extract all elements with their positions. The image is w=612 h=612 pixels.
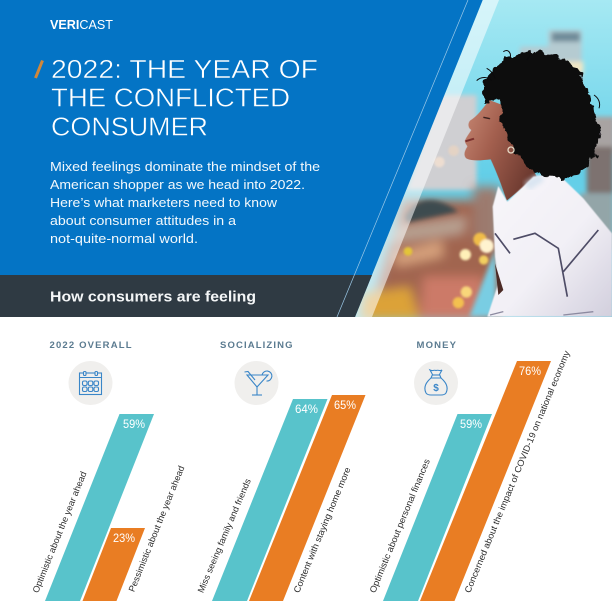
- title: THE CONFLICTED: [51, 84, 290, 112]
- intro text: American shopper as we head into 2022.: [50, 177, 305, 192]
- neck and face: [464, 100, 537, 201]
- logo: Vericast: VERICAST: [50, 18, 113, 32]
- bar: optimistic 59%: [45, 414, 154, 601]
- heading band background: [0, 275, 372, 317]
- bar: concerned about COVID-19 impact 76%: [420, 361, 551, 601]
- photo: woman looking up on a city rooftop: [340, 0, 612, 320]
- column: money: [368, 340, 572, 601]
- bar: optimistic about personal finances 59%: [383, 414, 492, 601]
- section heading: How consumers are feeling: How consumers are feeling: [50, 290, 256, 306]
- bar: pessimistic 23%: 23%: [113, 533, 135, 545]
- title: CONSUMER: [51, 114, 208, 142]
- icon: money bag: $: [433, 383, 439, 394]
- label: pessimistic about the year ahead: Pessimistic about the year ahead: [127, 464, 186, 593]
- bar: optimistic about personal finances 59%: 59%: [460, 419, 482, 431]
- column: socializing: [196, 340, 366, 601]
- column: 2022 overall: [31, 340, 186, 601]
- intro text: about consumer attitudes in a: [50, 213, 237, 228]
- column heading: 2022 OVERALL: [50, 340, 132, 351]
- translucent diagonal band: [355, 0, 499, 317]
- bar: concerned about COVID-19 impact 76%: 76%: [519, 366, 541, 378]
- bar: miss seeing family and friends 64%: [212, 399, 328, 601]
- column heading: SOCIALIZING: [220, 340, 292, 351]
- hair: [483, 51, 598, 179]
- title: [51, 56, 318, 142]
- intro text: Here’s what marketers need to know: [50, 195, 278, 210]
- label: content with staying home more: Content with staying home more: [292, 466, 353, 594]
- bokeh lights: [404, 145, 494, 308]
- label: concerned about the impact of COVID-19 on national economy: Concerned about the impact of COVID-19 on national economy: [463, 349, 572, 594]
- icon: martini glass: [234, 361, 278, 405]
- bar: content with staying home more 65%: [249, 395, 366, 601]
- icon: calendar: [68, 361, 112, 405]
- bar: miss seeing family and friends 64%: 64%: [295, 404, 318, 416]
- icon: orange slash: [36, 60, 42, 78]
- intro text: not-quite-normal world.: [50, 231, 198, 246]
- icon: money bag: [414, 361, 458, 405]
- thin diagonal line: [337, 0, 468, 317]
- panel: blue header: [0, 0, 483, 317]
- intro text: [50, 159, 320, 246]
- earring: [508, 147, 514, 153]
- blurred city background: [407, 30, 612, 250]
- title: 2022: THE YEAR OF: [51, 56, 318, 84]
- label: miss seeing family and friends: Miss seeing family and friends: [196, 477, 253, 594]
- column heading: MONEY: [416, 340, 457, 351]
- bar: optimistic 59%: 59%: [123, 419, 145, 431]
- intro text: Mixed feelings dominate the mindset of the: [50, 159, 320, 174]
- shirt: [487, 173, 612, 317]
- label: optimistic about the year ahead: Optimistic about the year ahead: [31, 470, 89, 594]
- bar: content with staying home more 65%: 65%: [334, 400, 356, 412]
- bar: pessimistic 23%: [82, 528, 145, 601]
- label: optimistic about personal finances: Optimistic about personal finances: [368, 457, 432, 594]
